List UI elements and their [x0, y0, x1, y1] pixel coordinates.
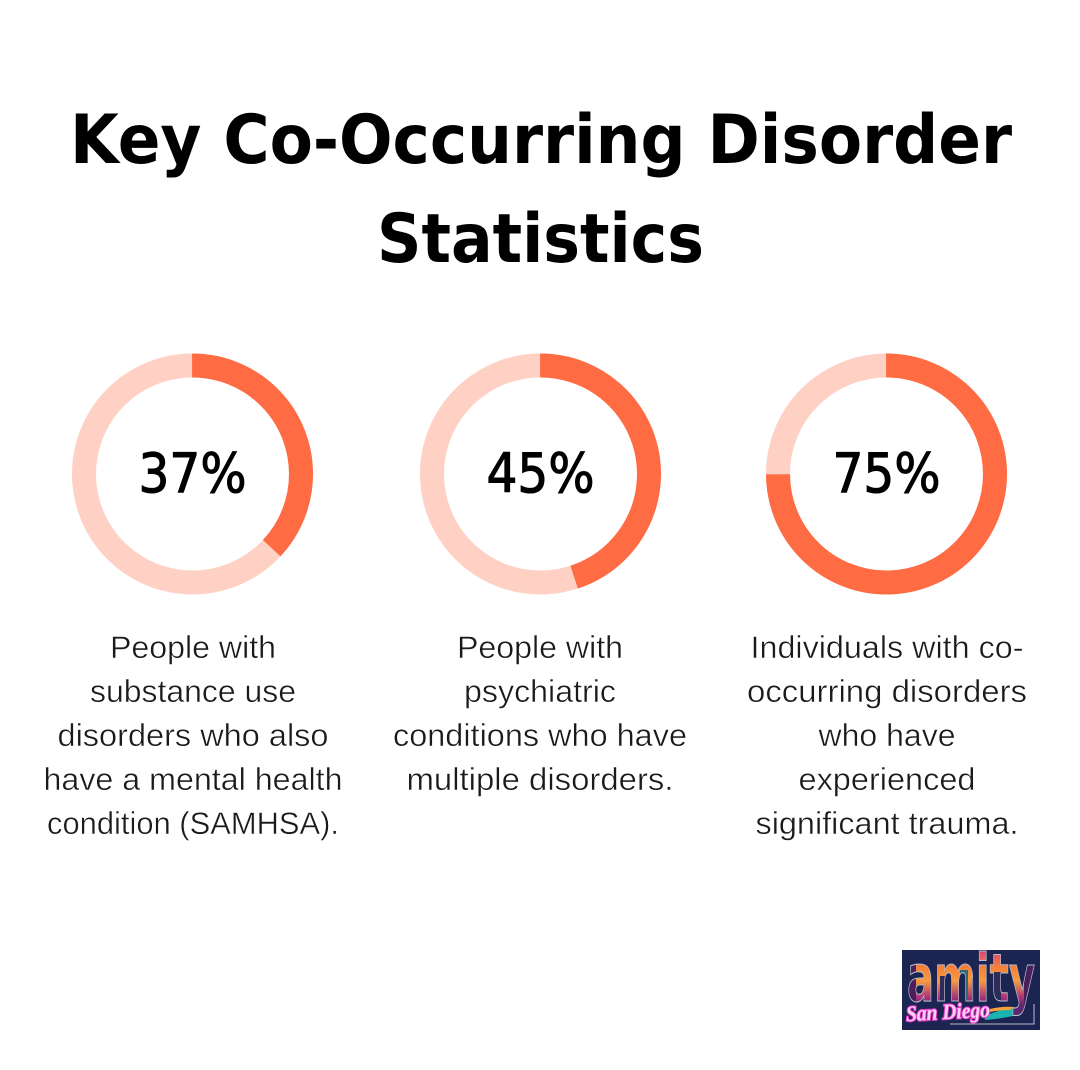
title: Key Co-Occurring Disorder [70, 101, 1012, 180]
donut chart: 75% [778, 366, 995, 582]
description: trauma: significant trauma. [756, 805, 1018, 841]
description: substance use: substance use [90, 673, 296, 709]
description: psychiatric conditions: People with [457, 629, 623, 665]
panel: 75 percent statistic [747, 366, 1027, 841]
description: trauma [747, 629, 1027, 841]
description: psychiatric conditions [393, 629, 687, 797]
title: Statistics [377, 200, 704, 279]
description: substance use: People with [110, 629, 276, 665]
description: substance use: disorders who also [58, 717, 328, 753]
logo: Amity San Diego [902, 940, 1040, 1030]
value: 75%: 75% [832, 442, 940, 505]
title [70, 101, 1012, 279]
description: substance use [44, 629, 342, 841]
description: substance use: have a mental health [44, 761, 342, 797]
description: trauma: Individuals with co- [750, 629, 1024, 665]
description: trauma: occurring disorders [747, 673, 1027, 709]
description: psychiatric conditions: multiple disorders. [406, 761, 674, 797]
panel: 37 percent statistic [44, 366, 342, 841]
panel: 45 percent statistic [393, 366, 687, 797]
description: psychiatric conditions: psychiatric [464, 673, 616, 709]
description: substance use: condition (SAMHSA). [47, 805, 339, 841]
description: trauma: who have [817, 717, 956, 753]
donut chart: 45% [432, 366, 649, 582]
description: psychiatric conditions: conditions who have [393, 717, 687, 753]
value: 45%: 45% [486, 442, 594, 505]
logo script: San Diego [905, 997, 990, 1026]
description: trauma: experienced [798, 761, 976, 797]
value: 37%: 37% [138, 442, 246, 505]
donut chart: 37% [84, 366, 301, 582]
